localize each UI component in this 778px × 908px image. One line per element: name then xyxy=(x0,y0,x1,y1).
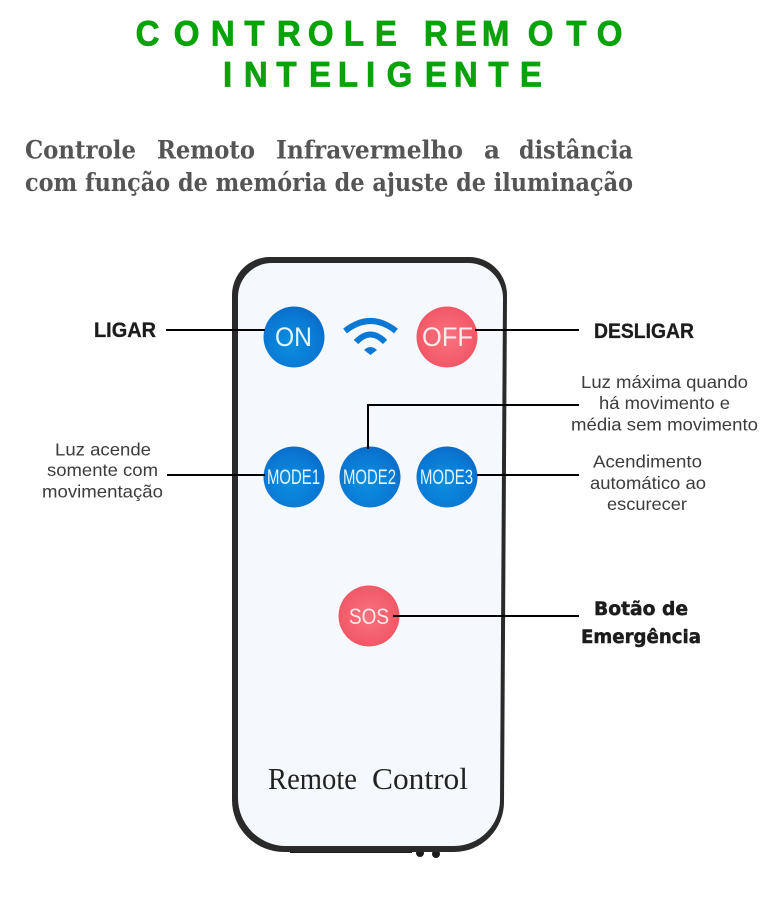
button: SOS: SOS xyxy=(349,604,389,629)
callout line: mode 3 xyxy=(477,474,579,476)
subtitle xyxy=(25,136,633,197)
callout line: desligar xyxy=(475,329,579,331)
button: MODE1 xyxy=(264,446,324,508)
title xyxy=(136,14,622,95)
callout line: sos xyxy=(393,615,579,617)
title: INTELIGENTE xyxy=(223,55,542,95)
remote control print label xyxy=(268,761,468,796)
label: mode 2 description: Luz máxima quando xyxy=(581,372,748,392)
subtitle: distância xyxy=(519,136,633,164)
button: ON: ON xyxy=(275,322,312,352)
button: SOS xyxy=(338,586,400,646)
subtitle: a xyxy=(484,136,500,164)
callout line: mode 1 xyxy=(167,474,265,476)
remote control print label: Control xyxy=(372,761,468,796)
subtitle: Infravermelho xyxy=(276,136,463,164)
label: emergency button xyxy=(581,598,701,648)
label: emergency button: Botão de xyxy=(594,598,688,620)
button: MODE2: MODE2 xyxy=(343,466,396,489)
label: mode 3 description: Acendimento xyxy=(593,452,702,472)
label: mode 2 description: média sem movimento xyxy=(571,414,758,434)
subtitle: Remoto xyxy=(157,136,255,164)
label: mode 2 description xyxy=(571,372,758,434)
button: MODE2 xyxy=(340,446,400,508)
title: CONTROLE REMOTO xyxy=(136,14,622,54)
label: mode 1 description: somente com xyxy=(47,460,158,480)
button: ON xyxy=(264,306,324,368)
label: mode 1 description: Luz acende xyxy=(55,440,151,460)
label: mode 1 description xyxy=(42,440,163,502)
button: MODE3: MODE3 xyxy=(420,466,473,489)
callout line: ligar xyxy=(166,329,265,331)
remote control body xyxy=(232,257,507,858)
button: OFF xyxy=(416,306,478,368)
subtitle: Controle xyxy=(25,136,136,164)
callout line: mode 2 xyxy=(368,405,579,449)
label: mode 2 description: há movimento e xyxy=(599,393,730,413)
label: desligar: DESLIGAR xyxy=(594,320,694,343)
button: MODE1: MODE1 xyxy=(267,466,320,489)
label: mode 3 description xyxy=(590,452,706,514)
remote control print label: Remote xyxy=(268,761,357,796)
subtitle: com função de memória de ajuste de iluminação xyxy=(25,168,633,197)
label: mode 3 description: escurecer xyxy=(607,494,687,514)
button: MODE3 xyxy=(416,446,478,508)
icon: wifi signal xyxy=(345,321,396,355)
button: OFF: OFF xyxy=(422,322,473,352)
label: emergency button: Emergência xyxy=(581,626,701,648)
label: mode 1 description: movimentação xyxy=(42,482,163,502)
label: mode 3 description: automático ao xyxy=(590,473,706,493)
label: ligar: LIGAR xyxy=(94,319,156,342)
